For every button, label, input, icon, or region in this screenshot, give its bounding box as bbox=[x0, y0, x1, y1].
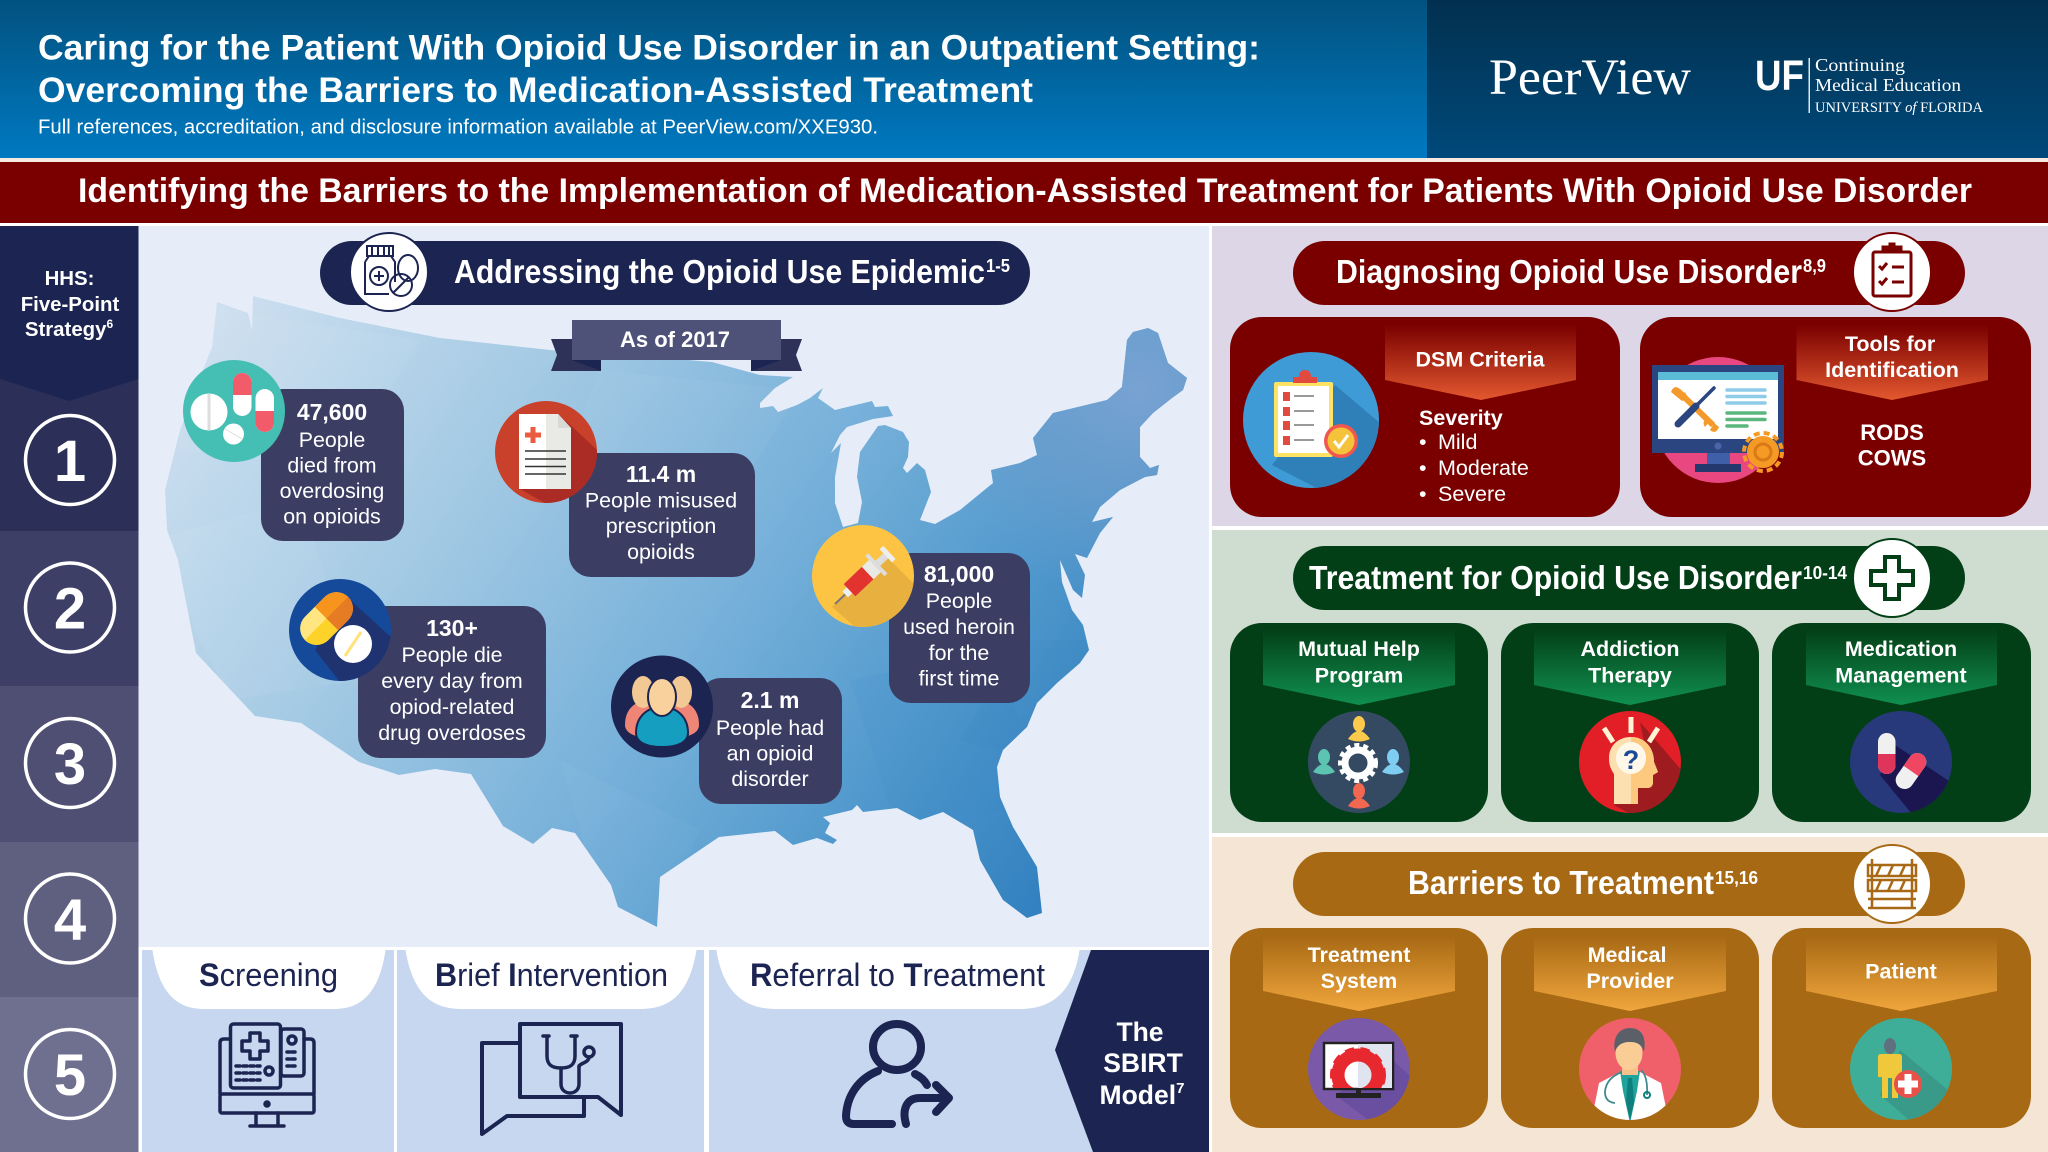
banner: identifying the barriers bbox=[0, 162, 2048, 223]
title: Caring for the Patient With Opioid Use Disorder in an Outpatient Setting: bbox=[38, 28, 1260, 68]
banner: medication management: Medication bbox=[1845, 637, 1957, 661]
stat: 2.1 m disorder: 2.1 m bbox=[741, 687, 799, 713]
heading: HHS strategy: 6 bbox=[106, 317, 113, 331]
icon: syringe bbox=[812, 525, 914, 627]
card: DSM criteria bbox=[1230, 317, 1620, 517]
panel: treatment for opioid use disorder bbox=[1212, 530, 2048, 833]
step number 1: 1 bbox=[54, 429, 86, 494]
banner: treatment system bbox=[1263, 936, 1455, 1011]
SBIRT label: Model bbox=[1100, 1080, 1176, 1110]
icon: speech bubbles with stethoscope bbox=[482, 1024, 621, 1134]
heading pill: barriers bbox=[1293, 845, 1965, 923]
icon: person with arrow bbox=[846, 1024, 949, 1124]
icon: road barrier bbox=[1853, 845, 1931, 923]
step number 3: 3 bbox=[54, 732, 86, 797]
stat: 11.4 m misused: People misused bbox=[585, 488, 737, 512]
stat: 130+ die every day: People die bbox=[401, 643, 503, 667]
card: treatment system bbox=[1230, 928, 1488, 1128]
banner: medication management bbox=[1806, 629, 1997, 705]
banner: addiction therapy: Addiction bbox=[1580, 637, 1680, 661]
banner: mutual help program bbox=[1263, 629, 1455, 705]
stat: 130+ die every day: opiod-related bbox=[390, 695, 514, 719]
heading pill: treatment bbox=[1293, 539, 1965, 617]
card: addiction therapy bbox=[1501, 623, 1759, 825]
column: brief intervention: Brief Intervention bbox=[435, 957, 668, 993]
stat: 130+ die every day bbox=[289, 579, 546, 758]
heading pill: barriers: 15,16 bbox=[1715, 868, 1758, 888]
stat: 2.1 m disorder: People had bbox=[716, 716, 824, 740]
stat: 47,600 deaths: 47,600 bbox=[297, 399, 367, 425]
severity list: • bbox=[1419, 482, 1427, 506]
banner: DSM criteria bbox=[1385, 325, 1576, 400]
severity list: Mild bbox=[1438, 430, 1477, 454]
stat: 47,600 deaths: People bbox=[299, 428, 365, 452]
logo: UF Continuing Medical Education bbox=[1755, 52, 1983, 116]
panel: HHS five-point strategy bbox=[0, 226, 138, 1152]
banner: medical provider: Medical bbox=[1588, 943, 1666, 967]
stat: 81,000 heroin: People bbox=[926, 589, 992, 613]
heading pill: addressing the epidemic: Addressing the Opioid Use Epidemic bbox=[454, 253, 985, 290]
ribbon: as of 2017: As of 2017 bbox=[620, 327, 730, 352]
stat: 2.1 m disorder: an opioid bbox=[727, 742, 813, 766]
heading: HHS strategy: Five-Point bbox=[21, 294, 119, 316]
banner: patient bbox=[1806, 936, 1997, 1011]
heading: HHS strategy: HHS: bbox=[45, 268, 94, 290]
icon: doctor bbox=[1579, 1018, 1681, 1125]
step number 3 bbox=[26, 718, 114, 808]
icon: monitor with gear bbox=[1308, 1018, 1410, 1120]
card: patient bbox=[1772, 928, 2031, 1128]
banner: mutual help program: Mutual Help bbox=[1298, 637, 1420, 661]
icon: prescription document bbox=[495, 401, 597, 503]
stat: 11.4 m misused bbox=[495, 401, 755, 577]
banner: DSM criteria: DSM Criteria bbox=[1415, 348, 1546, 372]
heading pill: diagnosing bbox=[1293, 233, 1965, 311]
banner: identifying the barriers: Identifying the Barriers to the Implementation of Medication-Assisted Treatment for Patients With Opioid Use Disorder bbox=[78, 172, 1972, 210]
stat: 81,000 heroin: for the bbox=[929, 641, 989, 665]
panel: addressing the opioid use epidemic bbox=[138, 180, 1210, 960]
severity list: • bbox=[1419, 430, 1427, 454]
heading pill: treatment: 10-14 bbox=[1803, 563, 1847, 583]
banner: treatment system: System bbox=[1321, 969, 1397, 993]
SBIRT label: The bbox=[1116, 1017, 1164, 1047]
stat: 11.4 m misused: opioids bbox=[627, 540, 695, 564]
icon: pills bbox=[183, 360, 285, 462]
step number 4: 4 bbox=[54, 888, 86, 952]
step number 5: 5 bbox=[54, 1043, 86, 1108]
heading pill: addressing the epidemic bbox=[320, 233, 1030, 311]
banner: addiction therapy: Therapy bbox=[1588, 664, 1672, 688]
severity list: Severe bbox=[1438, 482, 1506, 506]
card: mutual help program bbox=[1230, 623, 1488, 822]
heading: HHS strategy: Strategy bbox=[25, 319, 107, 341]
references note: Full references, accreditation, and disclosure information available at PeerView.com/XXE930. bbox=[38, 116, 878, 138]
SBIRT label bbox=[1055, 950, 1209, 1152]
banner: tools for identification: Tools for bbox=[1845, 332, 1936, 356]
column: screening bbox=[152, 947, 386, 1126]
icon: patient with cross bbox=[1850, 1018, 1952, 1120]
severity list: • bbox=[1419, 456, 1427, 480]
icon: monitor with tools bbox=[1652, 357, 1784, 483]
title: Overcoming the Barriers to Medication-Assisted Treatment bbox=[38, 71, 1033, 110]
column: referral to treatment bbox=[716, 947, 1080, 1124]
icon: computer with medical chart bbox=[220, 1024, 314, 1126]
icon: medicine bottle bbox=[350, 233, 428, 311]
stat: 81,000 heroin: first time bbox=[919, 666, 999, 690]
icon: head with question mark bbox=[1579, 711, 1681, 813]
stat: 81,000 heroin: 81,000 bbox=[924, 561, 994, 587]
SBIRT label: SBIRT bbox=[1103, 1048, 1183, 1078]
icon: capsules bbox=[1850, 711, 1952, 813]
heading pill: addressing the epidemic: 1-5 bbox=[986, 256, 1010, 276]
icon: checklist clipboard bbox=[1853, 233, 1931, 311]
icon: clipboard with check bbox=[1243, 352, 1379, 488]
tool names: RODS bbox=[1860, 420, 1924, 445]
banner: medical provider bbox=[1534, 936, 1726, 1011]
logo: UF Continuing Medical Education: Medical Education bbox=[1815, 75, 1961, 95]
panel: diagnosing opioid use disorder bbox=[1212, 226, 2048, 526]
severity list: Moderate bbox=[1438, 456, 1529, 480]
step number 5 bbox=[26, 1030, 114, 1118]
banner: addiction therapy bbox=[1534, 629, 1726, 705]
heading pill: treatment: Treatment for Opioid Use Disorder bbox=[1309, 559, 1802, 596]
stat: 2.1 m disorder: disorder bbox=[731, 767, 809, 791]
card: tools for identification bbox=[1640, 317, 2031, 517]
stat: 81,000 heroin: used heroin bbox=[903, 615, 1015, 639]
icon: capsule and tablet bbox=[289, 579, 391, 681]
logo: UF Continuing Medical Education: UNIVERSITY of FLORIDA bbox=[1815, 100, 1983, 116]
stat: 47,600 deaths: overdosing bbox=[280, 479, 384, 503]
logo: UF Continuing Medical Education: UF bbox=[1755, 52, 1804, 100]
header band bbox=[0, 0, 2048, 162]
banner: medical provider: Provider bbox=[1586, 969, 1674, 993]
column: referral to treatment: Referral to Treatment bbox=[750, 957, 1045, 993]
step number 1 bbox=[26, 416, 114, 504]
logo: UF Continuing Medical Education: Continuing bbox=[1815, 55, 1905, 75]
stat: 11.4 m misused: prescription bbox=[606, 514, 716, 538]
stat: 47,600 deaths: on opioids bbox=[283, 504, 381, 528]
ribbon: as of 2017 bbox=[551, 320, 802, 371]
banner: patient: Patient bbox=[1865, 960, 1937, 984]
heading pill: diagnosing: 8,9 bbox=[1803, 256, 1826, 276]
heading pill: barriers: Barriers to Treatment bbox=[1408, 864, 1714, 901]
banner: medication management: Management bbox=[1835, 664, 1967, 688]
icon: group of people bbox=[611, 656, 713, 758]
step number 2 bbox=[26, 563, 114, 652]
card: medication management bbox=[1772, 623, 2031, 825]
step number 4 bbox=[26, 874, 114, 963]
SBIRT label: 7 bbox=[1176, 1080, 1184, 1097]
column: brief intervention bbox=[405, 947, 697, 1134]
stat: 2.1 m disorder bbox=[611, 656, 842, 804]
panel: barriers to treatment bbox=[1212, 837, 2048, 1152]
card: medical provider bbox=[1501, 928, 1759, 1128]
banner: tools for identification bbox=[1796, 325, 1988, 400]
stat: 47,600 deaths: died from bbox=[287, 454, 377, 478]
logo: PeerView: PeerView bbox=[1489, 50, 1691, 106]
heading pill: diagnosing: Diagnosing Opioid Use Disorder bbox=[1336, 253, 1802, 290]
stat: 130+ die every day: drug overdoses bbox=[378, 721, 526, 745]
icon: medical cross bbox=[1853, 539, 1931, 617]
icon: people around a gear bbox=[1308, 711, 1410, 813]
map of the United States bbox=[165, 296, 1187, 927]
banner: treatment system: Treatment bbox=[1308, 943, 1410, 967]
column: screening: Screening bbox=[199, 957, 338, 993]
title bbox=[38, 28, 1260, 110]
banner: tools for identification: Identification bbox=[1825, 358, 1959, 382]
stat: 81,000 heroin bbox=[812, 525, 1030, 703]
severity list: Severity bbox=[1419, 406, 1503, 430]
stat: 130+ die every day: 130+ bbox=[426, 615, 478, 641]
severity list bbox=[1419, 406, 1529, 506]
stat: 11.4 m misused: 11.4 m bbox=[626, 461, 696, 487]
panel: SBIRT model bbox=[138, 947, 1209, 1152]
stat: 130+ die every day: every day from bbox=[381, 669, 523, 693]
step number 2: 2 bbox=[54, 576, 86, 642]
banner: mutual help program: Program bbox=[1315, 664, 1403, 688]
tool names: COWS bbox=[1858, 446, 1926, 470]
stat: 47,600 deaths bbox=[183, 360, 404, 541]
icon: head with question mark: ? bbox=[1623, 745, 1639, 775]
